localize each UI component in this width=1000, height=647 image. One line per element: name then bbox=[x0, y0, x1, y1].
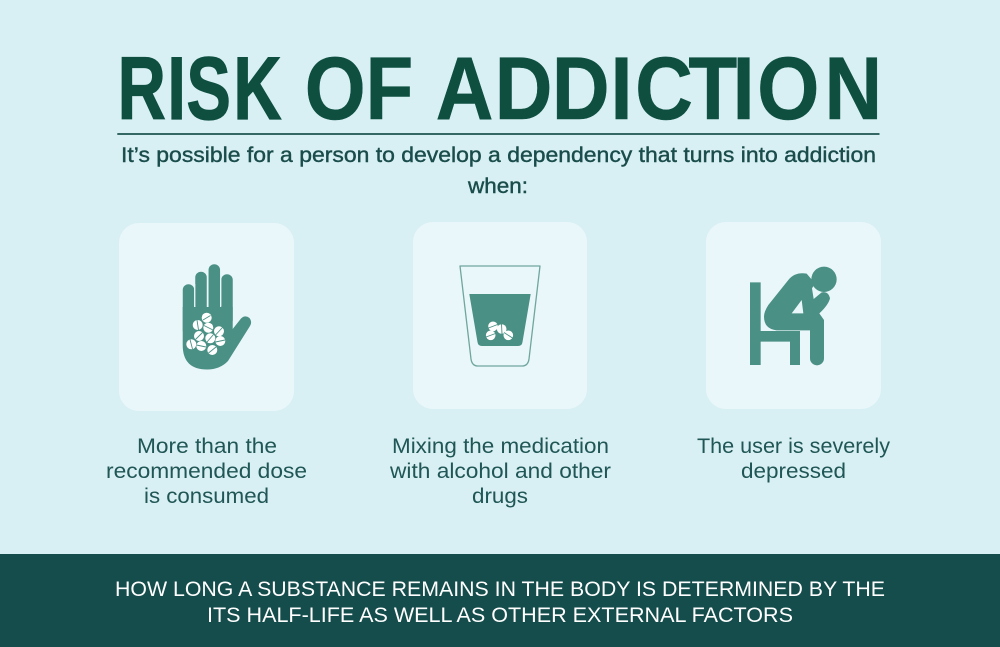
caption 1: is consumed bbox=[144, 485, 269, 508]
subtitle: It’s possible for a person to develop a dependency that turns into addiction bbox=[121, 143, 876, 167]
panel: mixing bbox=[389, 222, 611, 508]
caption 2: drugs bbox=[472, 485, 528, 508]
subtitle: when: bbox=[467, 174, 528, 198]
title: RISK bbox=[118, 39, 282, 138]
caption 3: The user is severely bbox=[697, 435, 891, 458]
footer text bbox=[115, 578, 885, 627]
title bbox=[118, 38, 882, 138]
title: ADDICTION bbox=[436, 38, 882, 138]
panel: depression bbox=[697, 222, 891, 483]
subtitle bbox=[121, 143, 876, 198]
pills in glass bbox=[486, 322, 513, 340]
caption 2: with alcohol and other bbox=[389, 460, 611, 483]
title: OF bbox=[305, 38, 413, 138]
caption 1 bbox=[106, 435, 307, 508]
caption 2 bbox=[389, 435, 611, 508]
icon: glass with pills bbox=[460, 266, 540, 366]
caption 1: More than the bbox=[137, 435, 277, 458]
footer text: HOW LONG A SUBSTANCE REMAINS IN THE BODY IS DETERMINED BY THE bbox=[115, 578, 885, 601]
card 3 bbox=[706, 222, 881, 409]
icon: depressed person on chair bbox=[750, 267, 837, 365]
caption 3 bbox=[697, 435, 891, 483]
card 1 bbox=[119, 223, 294, 411]
icon: hand holding pills bbox=[183, 270, 251, 370]
caption 1: recommended dose bbox=[106, 460, 307, 483]
card 2 bbox=[413, 222, 587, 409]
caption 2: Mixing the medication bbox=[392, 435, 609, 458]
caption 3: depressed bbox=[741, 460, 846, 483]
footer text: ITS HALF-LIFE AS WELL AS OTHER EXTERNAL FACTORS bbox=[207, 604, 793, 627]
pills in hand bbox=[186, 313, 225, 355]
footer band bbox=[0, 554, 1000, 647]
panel: too much dose bbox=[106, 223, 307, 508]
